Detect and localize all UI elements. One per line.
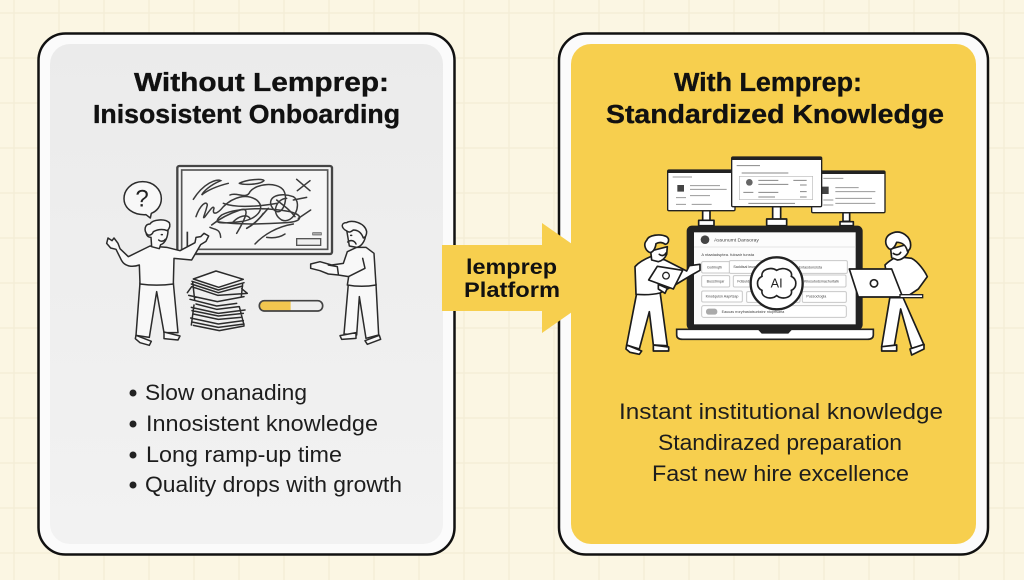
heading: without Lemprep: Without Lemprep: xyxy=(134,69,389,97)
list: problems xyxy=(130,380,402,497)
icon: laptop with AI dashboard: Assunumt Dansoray xyxy=(714,238,759,244)
heading: with Lemprep xyxy=(606,69,944,129)
icon: AI circle badge xyxy=(751,257,803,309)
icon: laptop with AI dashboard: Eauuas rroryfrastatsurkstnr ntoprtsarta xyxy=(722,310,785,314)
list: problems: Long ramp-up time xyxy=(146,442,342,467)
icon: question speech bubble: ? xyxy=(135,186,149,213)
icon: laptop with AI dashboard: A ntaatadsptea. fuksatr tunsta xyxy=(701,252,755,257)
icon: laptop with AI dashboard: Knodqulsn Aaprtsap xyxy=(706,295,738,299)
icon: laptop with AI dashboard: Busstrnqar xyxy=(707,280,725,284)
list: problems: Innosistent knowledge xyxy=(146,411,378,436)
icon: question speech bubble xyxy=(124,182,161,218)
arrow: lemprep platform xyxy=(442,223,572,333)
heading: with Lemprep: Standardized Knowledge xyxy=(606,101,944,129)
figure: person with tablet xyxy=(626,235,700,354)
heading: with Lemprep: With Lemprep: xyxy=(674,69,862,97)
icon: AI circle badge: AI xyxy=(771,277,783,291)
icon: laptop with AI dashboard: Fdisuldsi xyxy=(737,280,752,284)
icon: laptop with AI dashboard: Saddisal leuge xyxy=(733,265,757,269)
list: problems: Slow onanading xyxy=(145,380,307,405)
icon: laptop with AI dashboard xyxy=(677,226,873,339)
text: benefits xyxy=(619,399,943,486)
illustration: confused team at messy whiteboard xyxy=(107,166,381,345)
panel: with Lemprep xyxy=(559,34,988,554)
panel: without Lemprep xyxy=(38,34,454,554)
text: benefits: Instant institutional knowledge xyxy=(619,399,943,424)
heading: without Lemprep xyxy=(93,69,400,129)
icon: laptop with AI dashboard: Pussoctogla xyxy=(806,295,827,299)
icon: progress bar xyxy=(259,301,323,311)
text: benefits: Fast new hire excellence xyxy=(652,461,909,486)
icon: stack of papers xyxy=(187,271,247,331)
list: problems: Quality drops with growth xyxy=(145,472,402,497)
icon: laptop with AI dashboard: Gotrlnqth xyxy=(707,266,722,270)
figure: left person xyxy=(107,220,209,345)
arrow: lemprep platform: Platform xyxy=(464,279,560,302)
figure: right person xyxy=(311,221,381,344)
icon: laptop with AI dashboard: Kilosutodsmachurtatk xyxy=(804,280,839,284)
icon: whiteboard with scribbles xyxy=(177,166,332,254)
figure: person with laptop xyxy=(849,232,927,355)
text: benefits: Standirazed preparation xyxy=(658,430,902,455)
icon: three dashboard monitors xyxy=(668,157,885,226)
illustration: team using AI knowledge platform xyxy=(626,157,927,355)
heading: without Lemprep: Inisosistent Onboarding xyxy=(93,101,400,129)
icon: laptop with AI dashboard: Entasdonsrsta xyxy=(799,265,823,269)
arrow: lemprep platform: lemprep xyxy=(466,256,557,279)
